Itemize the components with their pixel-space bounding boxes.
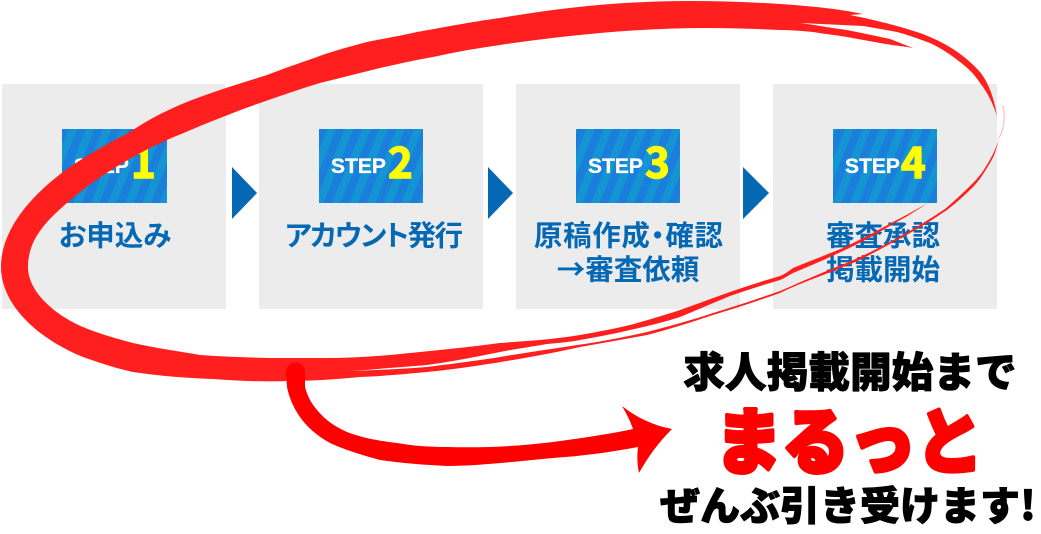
panel: step 2 bbox=[259, 84, 483, 309]
main emphasis: まるっと bbox=[715, 384, 983, 489]
arrow: step 2 to 3 bbox=[488, 167, 513, 219]
panel: step 3 bbox=[516, 84, 740, 309]
step 1 label: お申込み bbox=[59, 214, 171, 254]
step 1 badge bbox=[62, 129, 167, 203]
step 1 badge: 1 bbox=[131, 130, 156, 191]
step 4 label: 掲載開始 bbox=[826, 248, 940, 288]
panel: step 4 bbox=[773, 84, 997, 309]
step 2 label: アカウント発行 bbox=[285, 214, 463, 254]
step 4 badge: 4 bbox=[901, 130, 926, 191]
step 4 label bbox=[826, 214, 940, 288]
step 2 badge: STEP bbox=[331, 155, 386, 178]
step 1 badge: STEP bbox=[74, 155, 129, 178]
step 2 badge: 2 bbox=[388, 130, 413, 191]
red brush ellipse around steps bbox=[1, 1, 1004, 381]
line 1: 求人掲載開始まで bbox=[683, 340, 1017, 400]
callout text bbox=[660, 340, 1036, 532]
step 4 badge: STEP bbox=[845, 155, 900, 178]
arrow: step 3 to 4 bbox=[743, 167, 769, 219]
step 3 label: →審査依頼 bbox=[557, 248, 700, 288]
step 3 label bbox=[534, 214, 723, 288]
step 3 label: 原稿作成・確認 bbox=[534, 214, 723, 254]
panel: step 1 bbox=[2, 84, 226, 309]
step 4 badge bbox=[833, 129, 937, 203]
step 4 label: 審査承認 bbox=[826, 214, 940, 254]
line 3: ぜんぶ引き受けます! bbox=[660, 474, 1036, 532]
step 3 badge bbox=[576, 129, 680, 203]
red curved arrow bbox=[286, 362, 672, 473]
step 2 badge bbox=[319, 129, 423, 203]
step 3 badge: 3 bbox=[645, 130, 670, 191]
arrow: step 1 to 2 bbox=[232, 167, 257, 219]
step 3 badge: STEP bbox=[588, 155, 643, 178]
